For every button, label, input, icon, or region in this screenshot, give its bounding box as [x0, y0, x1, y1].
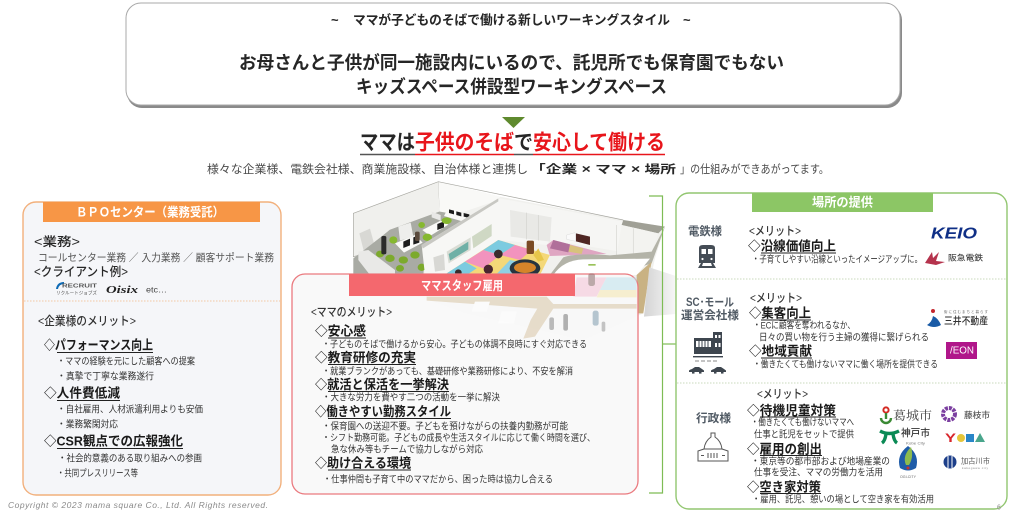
logo: Kobe city: 神戸市: [901, 426, 930, 440]
logo: Fujieda city: 藤枝市: [964, 410, 990, 420]
sub heading text: [207, 162, 829, 176]
panel: BPO center: <クライアント例>: [34, 265, 128, 279]
panel: BPO center: [23, 202, 281, 495]
merit: labor cost: ◇人件費低減: [44, 386, 120, 400]
section: government: <メリット>: [757, 387, 808, 401]
logo: Hankyu: [925, 252, 983, 265]
merit: peace of mind: ・子どものそばで働けるから安心。子どもの体調不良時にすぐ対応できる: [322, 338, 587, 350]
panel: BPO center: コールセンター業務 ／ 入力業務 ／ 顧客サポート業務: [38, 251, 274, 264]
merit: peace of mind: [315, 324, 587, 350]
main message heading: [360, 132, 665, 154]
panel: BPO center: <企業様のメリット>: [38, 313, 136, 328]
sub heading text: 」の仕組みができあがってます。: [680, 162, 829, 176]
main message heading: で: [514, 132, 533, 154]
section: government: ・雇用、託児、憩いの場として空き家を有効活用: [752, 494, 934, 506]
section: government: ◇待機児童対策: [747, 403, 836, 418]
header box: キッズスペース併設型ワーキングスペース: [356, 76, 667, 97]
section: shopping mall: ・ECに顧客を奪われるなか、: [753, 320, 855, 332]
panel header: place provision: [752, 193, 933, 212]
merit: job and daycare hunting: [315, 377, 500, 404]
logo: Kakogawa city: 加古川市: [961, 456, 990, 466]
illustration seen through panel: [427, 273, 637, 339]
section: government: ・働きたくても働けないママへ: [751, 416, 854, 428]
header box: ママが子どものそばで働ける新しいワーキングスタイル: [353, 12, 670, 28]
logo: Kobe city: [880, 426, 930, 446]
icon: building and cars: [689, 332, 726, 374]
merit: job and daycare hunting: ◇就活と保活を一挙解決: [315, 377, 449, 392]
section: shopping mall: ◇集客向上: [749, 306, 811, 320]
panel: mama staff employment: [292, 273, 638, 494]
logo: Kakogawa city: [944, 456, 990, 470]
icon: capitol building: [698, 433, 728, 461]
logo: Mitsui Fudosan: 街に住むまちと暮らす: [944, 309, 988, 314]
section: government: ◇空き家対策: [747, 480, 821, 494]
arrow: down triangle: [502, 117, 525, 128]
panel header: mama staff: ママスタッフ雇用: [421, 279, 503, 293]
header box: ~: [683, 12, 691, 28]
logo: Recruit: リクルートジョブズ: [56, 290, 97, 296]
merit: labor cost: ・自社雇用、人材派遣利用よりも安価: [57, 404, 203, 416]
merit: training: [315, 350, 573, 378]
logo: Mitsui Fudosan: 三井不動産: [944, 314, 988, 328]
panel: mama staff employment: <ママのメリット>: [311, 305, 392, 319]
panel: place provision: [676, 193, 1007, 509]
section: railway: <メリット>: [749, 224, 801, 238]
merit: mutual support: [315, 456, 553, 486]
section: government: ◇雇用の創出: [747, 442, 822, 456]
merit: labor cost: [44, 386, 203, 430]
merit: performance: ・真摯で丁寧な業務遂行: [57, 370, 154, 382]
header box: [126, 3, 902, 108]
merit: CSR: ・共同プレスリリース等: [57, 468, 138, 480]
merit: work style: ◇働きやすい勤務スタイル: [315, 404, 451, 419]
merit: CSR: ◇CSR観点での広報強化: [44, 434, 183, 448]
merit: peace of mind: ◇安心感: [315, 324, 366, 338]
section: shopping mall: <メリット>: [750, 291, 802, 305]
logo: Oiti city: [899, 446, 917, 479]
section: shopping mall: 運営会社様: [681, 308, 740, 322]
merit: work style: ・シフト勤務可能。子どもの成長や生活スタイルに応じて働く時間を選び、: [322, 432, 595, 444]
logo: KEIO: KEIO: [931, 226, 978, 242]
logo: Oiti city: OGI-CITY: [900, 475, 917, 479]
panel header: BPO center: ＢＰＯセンター（業務受託）: [76, 204, 224, 220]
merit: mutual support: ・仕事仲間も子育て中のママだから、困った時は協力し合える: [323, 474, 553, 486]
section: government: ・東京等の都市部および地場産業の: [751, 456, 890, 468]
facility illustration: [353, 182, 683, 340]
section: railway: 電鉄様: [688, 224, 722, 238]
header box: お母さんと子供が同一施設内にいるので、託児所でも保育園でもない: [239, 52, 784, 73]
section: railway: ◇沿線価値向上: [748, 238, 836, 254]
page number: 6: [997, 504, 1001, 512]
bracket connector: [649, 196, 676, 493]
merit: CSR: ・社会的意義のある取り組みへの参画: [58, 452, 202, 464]
sub heading text: 様々な企業様、電鉄会社様、商業施設様、自治体様と連携し: [207, 162, 528, 176]
logo: Kakogawa city: kakogawa city: [962, 466, 988, 470]
logo: Recruit: [56, 282, 98, 296]
logo: YODA: Y: [945, 431, 956, 445]
merit: training: ・就業ブランクがあっても、基礎研修や業務研修により、不安を解消: [322, 366, 573, 378]
panel header: BPO center: [43, 202, 260, 222]
merit: work style: ・保育園への送迎不要。子どもを預けながらの扶養内勤務が可能: [322, 420, 568, 432]
merit: work style: 急な休み等もチームで協力しながら対応: [331, 444, 483, 456]
section: shopping mall: ・働きたくても働けないママに働く場所を提供できる: [753, 358, 938, 370]
panel header: place provision: 場所の提供: [812, 194, 873, 210]
sub heading text: 「企業 × ママ × 場所: [530, 162, 677, 176]
merit: labor cost: ・業務繁閑対応: [57, 418, 118, 430]
panel header: mama staff: [349, 274, 575, 296]
merit: job and daycare hunting: ・大きな労力を費やす二つの活動を一挙に解決: [322, 392, 500, 404]
icon: train: [698, 245, 716, 268]
merit: training: ◇教育研修の充実: [315, 350, 416, 365]
client note: etc…: [146, 286, 167, 294]
section: railway: [688, 224, 983, 268]
merit: work style: [315, 404, 595, 456]
merit: performance: ・ママの経験を元にした顧客への提案: [57, 356, 195, 368]
section: shopping mall: 日々の買い物を行う主婦の獲得に繋げられる: [759, 332, 929, 344]
header box: ~: [331, 12, 339, 28]
copyright: Copyright © 2023 mama square Co., Ltd. All Rights reserved.: [8, 500, 268, 510]
main message heading: ママは: [360, 132, 415, 154]
section: shopping mall: SC･モール: [686, 297, 734, 309]
section: government: 行政様: [696, 411, 732, 425]
section: shopping mall: ◇地域貢献: [749, 344, 812, 358]
logo: Kobe city: Kobe City: [906, 440, 925, 446]
panel: BPO center: <業務>: [34, 234, 80, 249]
merit: CSR: [44, 434, 202, 480]
logo: Recruit: RECRUIT: [62, 284, 98, 290]
main message heading: 安心して働ける: [533, 132, 665, 154]
merit: performance: ◇パフォーマンス向上: [44, 338, 153, 352]
logo: Fujieda city: [943, 408, 990, 420]
section: railway: ・子育てしやすい沿線といったイメージアップに。: [752, 254, 922, 266]
main message heading: 子供のそば: [415, 132, 514, 154]
logo: Oisix: Oisix: [106, 284, 139, 296]
logo: Hankyu: 阪急電鉄: [948, 252, 983, 262]
section: government: 仕事を受注、ママの労働力を活用: [754, 466, 883, 478]
logo: YODA: [945, 431, 985, 445]
merit: mutual support: ◇助け合える環境: [315, 456, 411, 470]
logo: AEON: [946, 342, 977, 359]
merit: performance: [44, 338, 195, 382]
logo: Katsuragi city: 葛城市: [893, 406, 932, 424]
section: shopping mall: [681, 291, 988, 374]
logo: AEON: /EON: [950, 346, 974, 356]
section: government: 仕事と託児をセットで提供: [754, 428, 854, 440]
section: government: [696, 387, 990, 506]
logo: Mitsui Fudosan: [927, 309, 988, 328]
